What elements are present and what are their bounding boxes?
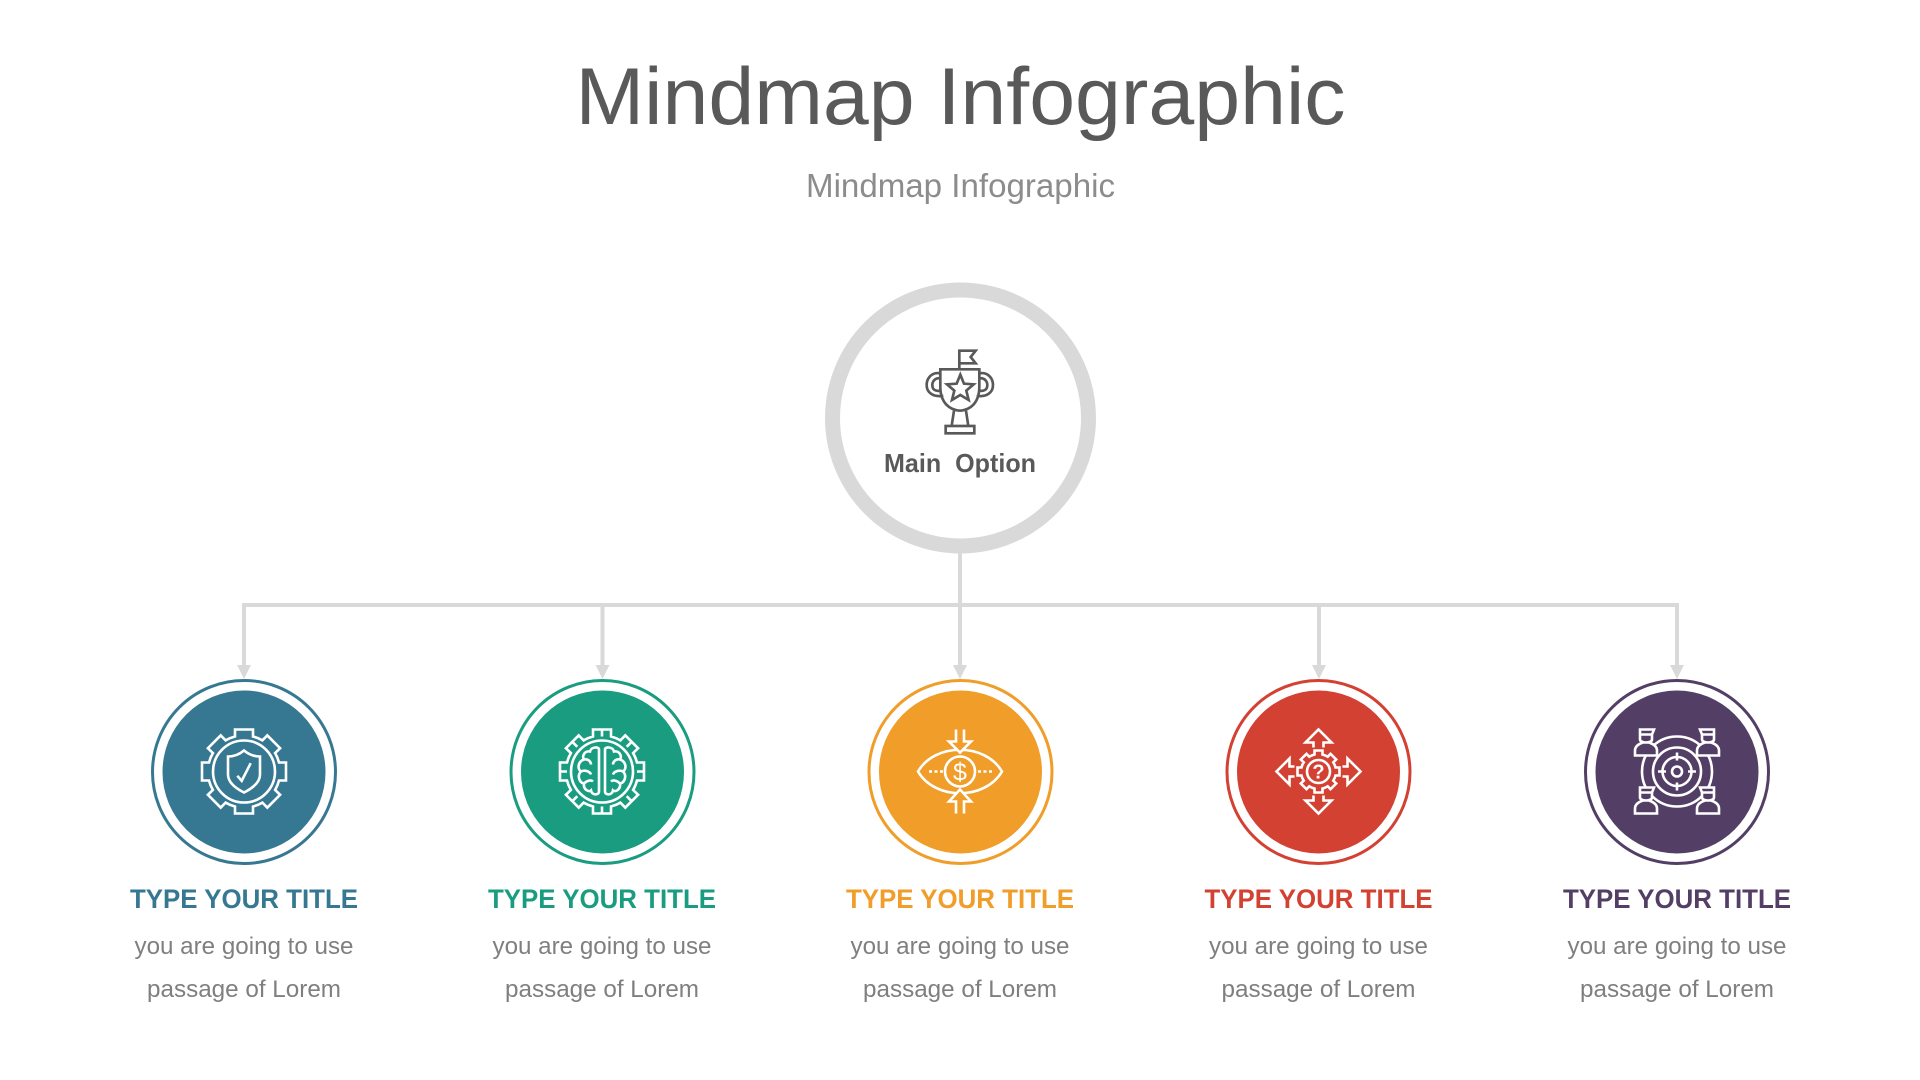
text: red: you are going to use — [1209, 933, 1428, 960]
title: blue: TYPE YOUR TITLE — [130, 884, 358, 914]
icon: target people — [1635, 730, 1719, 814]
text: orange: passage of Lorem — [863, 976, 1057, 1003]
text: orange: you are going to use — [850, 933, 1070, 960]
main option label: Main Option — [884, 448, 1036, 478]
panel: red item — [1204, 680, 1432, 1003]
text: purple: passage of Lorem — [1580, 976, 1774, 1003]
panel: green item — [488, 680, 716, 1003]
text: green — [492, 933, 712, 1003]
connector tree with arrows — [237, 553, 1684, 679]
panel: orange item — [846, 680, 1074, 1003]
text: green: you are going to use — [492, 933, 712, 960]
title: Mindmap Infographic — [576, 52, 1346, 142]
icon: eye dollar: $ — [953, 758, 967, 786]
text: purple: you are going to use — [1568, 933, 1786, 960]
text: red — [1209, 933, 1428, 1003]
text: green: passage of Lorem — [505, 976, 699, 1003]
text: blue: passage of Lorem — [147, 976, 341, 1003]
title: green: TYPE YOUR TITLE — [488, 884, 716, 914]
title: orange: TYPE YOUR TITLE — [846, 884, 1074, 914]
text: purple — [1568, 933, 1786, 1003]
title: red: TYPE YOUR TITLE — [1204, 884, 1432, 914]
icon: trophy — [927, 351, 993, 433]
icon: gear question arrows — [1276, 730, 1360, 814]
panel: blue item — [130, 680, 358, 1003]
icon: gear shield — [202, 730, 286, 814]
icon: gear question arrows: ? — [1312, 762, 1325, 784]
icon: eye dollar — [918, 730, 1002, 814]
panel: purple item — [1563, 680, 1791, 1003]
subtitle: Mindmap Infographic — [806, 167, 1115, 204]
title: purple: TYPE YOUR TITLE — [1563, 884, 1791, 914]
text: red: passage of Lorem — [1222, 976, 1416, 1003]
text: blue: you are going to use — [134, 933, 354, 960]
main option node — [832, 290, 1088, 546]
icon: gear brain — [560, 730, 644, 814]
text: blue — [134, 933, 354, 1003]
text: orange — [850, 933, 1070, 1003]
